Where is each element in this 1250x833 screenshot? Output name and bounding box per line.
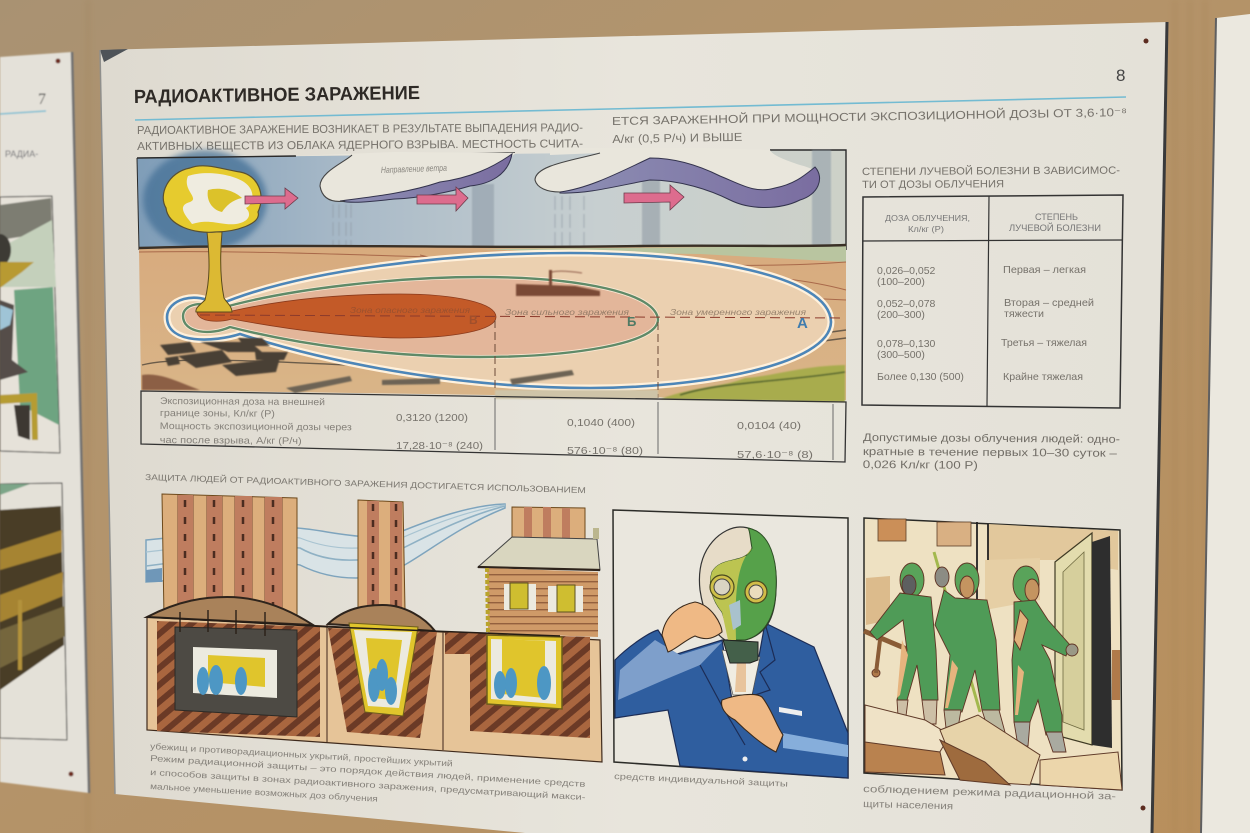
permissible doses note: Допустимые дозы облучения людей: одно-	[863, 432, 1120, 446]
radiation sickness heading	[862, 164, 1121, 191]
shelter caption: убежищ и противорадиационных укрытий, простейших укрытий	[150, 741, 453, 768]
contaminated air ribbon	[146, 504, 505, 582]
shelter one: radiation flow	[162, 494, 297, 622]
zone data table	[141, 391, 846, 462]
worker one with crowbar	[864, 563, 938, 724]
column headers: СТЕПЕНЬ	[1035, 212, 1078, 222]
zone letters: А	[797, 315, 808, 332]
permissible doses note: 0,026 Кл/кг (100 Р)	[863, 459, 978, 472]
house window	[504, 583, 536, 610]
zone B severe contamination	[183, 277, 658, 357]
intro text, right column: ЕТСЯ ЗАРАЖЕННОЙ ПРИ МОЩНОСТИ ЭКСПОЗИЦИОННОЙ ДОЗЫ ОТ 3,6·10⁻⁸	[612, 106, 1127, 128]
title: РАДИОАКТИВНОЕ ЗАРАЖЕНИЕ	[134, 83, 420, 108]
zone A moderate contamination	[167, 253, 831, 388]
zone letters	[469, 313, 808, 332]
column headers: ЛУЧЕВОЙ БОЛЕЗНИ	[1009, 222, 1101, 233]
zone V values: 0,3120 (1200)	[396, 412, 468, 424]
intro text, right column: А/кг (0,5 Р/ч) И ВЫШЕ	[612, 132, 743, 146]
wind direction label: Направление ветра	[381, 163, 447, 175]
sickness degrees: Третья – тяжелая	[1001, 337, 1087, 349]
land	[139, 245, 846, 400]
zone B values: 576·10⁻⁸ (80)	[567, 445, 643, 457]
ruined wall	[866, 519, 1118, 625]
shelter caption	[150, 741, 586, 804]
zone labels: Зона умеренного заражения	[670, 307, 807, 317]
zone V values	[396, 412, 483, 452]
dose ranges: 0,078–0,130	[877, 338, 936, 350]
shirt and tie	[722, 650, 760, 695]
settlement	[142, 338, 288, 390]
zone labels: Зона сильного заражения	[505, 307, 630, 317]
left neighbouring poster, sheet 7: РАДИА-	[5, 149, 38, 159]
ground panel	[147, 617, 602, 762]
sickness degrees: Первая – легкая	[1003, 264, 1086, 276]
row labels: Экспозиционная доза на внешней	[160, 396, 325, 408]
house window	[548, 585, 583, 612]
permissible doses note: кратные в течение первых 10–30 суток –	[863, 446, 1118, 460]
zone A values	[737, 420, 813, 461]
railway trains	[286, 370, 574, 393]
intro text, left column: АКТИВНЫХ ВЕЩЕСТВ ИЗ ОБЛАКА ЯДЕРНОГО ВЗРЫВА. МЕСТНОСТЬ СЧИТА-	[137, 138, 583, 153]
permissible doses note	[863, 432, 1120, 473]
left neighbouring poster, sheet 7	[0, 52, 89, 793]
contamination zones	[167, 253, 845, 398]
radiation sickness heading: ТИ ОТ ДОЗЫ ОБЛУЧЕНИЯ	[862, 178, 1004, 191]
radiation sickness table	[862, 195, 1123, 408]
shelter one: underground room	[157, 610, 320, 737]
dose ranges: 0,052–0,078	[877, 298, 936, 310]
gas mask filter	[723, 640, 758, 663]
row labels: Мощность экспозиционной дозы через	[160, 421, 352, 433]
row labels: границе зоны, Кл/кг (Р)	[160, 408, 275, 420]
left poster illustration: bunk benches	[0, 483, 67, 740]
zone letters: Б	[627, 314, 636, 329]
column headers: ДОЗА ОБЛУЧЕНИЯ,	[885, 214, 970, 223]
worker two with probe	[934, 552, 1006, 736]
dose ranges: Более 0,130 (500)	[877, 371, 964, 383]
protection heading: ЗАЩИТА ЛЮДЕЙ ОТ РАДИОАКТИВНОГО ЗАРАЖЕНИЯ ДОСТИГАЕТСЯ ИСПОЛЬЗОВАНИЕМ	[145, 471, 586, 495]
sickness degrees: тяжести	[1004, 308, 1044, 320]
zone B values	[567, 417, 643, 457]
gas mask panel	[613, 510, 848, 778]
cloud two	[535, 148, 820, 208]
zone B values: 0,1040 (400)	[567, 417, 635, 429]
people in shelter three	[494, 666, 551, 700]
zone labels	[350, 305, 807, 317]
zone labels: Зона опасного заражения	[350, 305, 471, 315]
sickness degrees	[1001, 264, 1094, 383]
mushroom cloud	[163, 166, 261, 312]
gas mask caption: средств индивидуальной защиты	[614, 771, 788, 789]
radiation sickness heading: СТЕПЕНИ ЛУЧЕВОЙ БОЛЕЗНИ В ЗАВИСИМОС-	[862, 164, 1121, 178]
sickness degrees: Вторая – средней	[1004, 297, 1094, 309]
column headers: Кл/кг (Р)	[908, 225, 944, 234]
zone V dangerous contamination	[197, 294, 496, 338]
sky	[137, 150, 846, 250]
lower hand	[722, 694, 783, 752]
fallout scene illustration	[137, 148, 846, 402]
zone A values: 57,6·10⁻⁸ (8)	[737, 449, 813, 461]
dose ranges: 0,026–0,052	[877, 265, 936, 277]
dose ranges: (200–300)	[877, 309, 925, 321]
fallout rain streaks	[333, 150, 831, 250]
cloud one	[293, 152, 516, 202]
shelter caption: Режим радиационной защиты – это порядок действия людей, применение средств	[150, 753, 586, 789]
people in shelter one	[197, 665, 247, 695]
right neighbouring poster edge	[1201, 14, 1250, 833]
zone letters: В	[469, 313, 478, 327]
dose ranges	[877, 265, 964, 383]
wind arrows	[245, 185, 684, 211]
rubble	[865, 705, 1122, 790]
regime caption	[863, 783, 1116, 812]
door	[1055, 533, 1120, 748]
intro text, right column	[612, 106, 1127, 146]
dose ranges: (300–500)	[877, 349, 925, 361]
shelters illustration	[146, 494, 602, 762]
dose ranges: (100–200)	[877, 276, 925, 288]
shelter three: house	[445, 507, 600, 738]
row labels	[160, 396, 352, 447]
factory	[516, 270, 600, 296]
zone A values: 0,0104 (40)	[737, 420, 801, 432]
shelter caption: мальное уменьшение возможных доз облучения	[150, 781, 379, 804]
zone V values: 17,28·10⁻⁸ (240)	[396, 440, 483, 452]
hills, lower right	[495, 365, 845, 402]
regime caption: щиты населения	[863, 799, 953, 812]
people in shelter two	[368, 659, 397, 705]
suit	[615, 623, 848, 778]
left poster illustration: seated figure	[0, 196, 60, 453]
upper hand	[662, 602, 722, 652]
worker three at door	[1012, 566, 1078, 752]
page number 7: 7	[38, 91, 46, 108]
shelter two: radiation flow	[358, 500, 405, 610]
shelter one: earth mound	[147, 597, 313, 625]
shelter two: mound and pit	[328, 605, 437, 738]
page number 8: 8	[1116, 66, 1125, 85]
radiation protection regime panel	[864, 518, 1122, 790]
intro text, left column	[137, 122, 583, 153]
row labels: час после взрыва, А/кг (Р/ч)	[160, 435, 302, 447]
intro text, left column: РАДИОАКТИВНОЕ ЗАРАЖЕНИЕ ВОЗНИКАЕТ В РЕЗУЛЬТАТЕ ВЫПАДЕНИЯ РАДИО-	[137, 122, 583, 137]
column headers	[885, 212, 1101, 234]
head with gas mask	[699, 527, 776, 640]
regime caption: соблюдением режима радиационной за-	[863, 783, 1116, 803]
shelter caption: и способов защиты в зонах радиоактивного заражения, предусматривающий макси-	[150, 767, 586, 802]
sickness degrees: Крайне тяжелая	[1003, 371, 1083, 383]
